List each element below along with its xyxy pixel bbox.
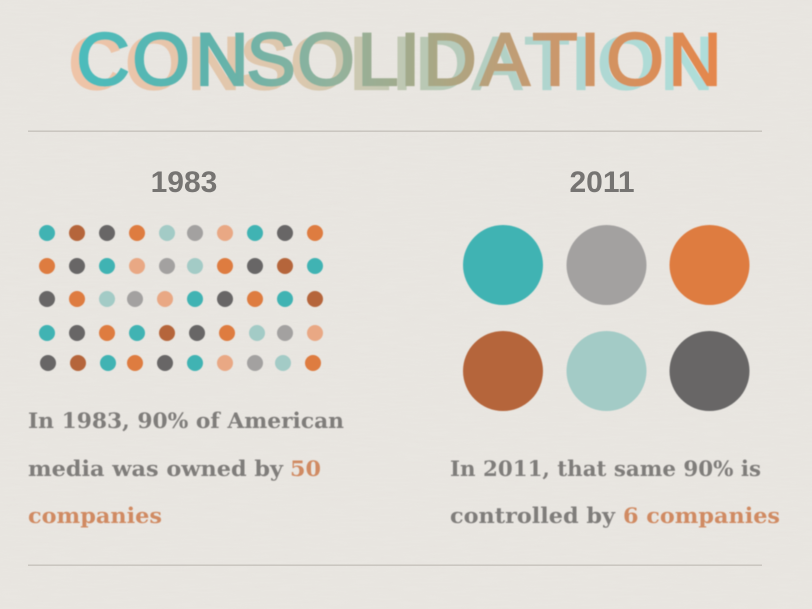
heading: 1983: 1983 xyxy=(151,166,217,199)
circles: 6 companies in 2011 xyxy=(463,225,750,411)
bottom divider xyxy=(28,564,762,566)
dot grid: 50 companies in 1983 xyxy=(39,225,323,371)
text block: 2011 caption xyxy=(450,456,780,528)
text block: 2011 caption: controlled by xyxy=(450,503,616,528)
title: CONSOLIDATION xyxy=(68,22,714,105)
text block: 1983 caption: companies xyxy=(28,503,162,528)
text block: 2011 caption: 6 companies xyxy=(623,503,780,528)
text block: 1983 caption: media was owned by xyxy=(28,456,284,481)
title: CONSOLIDATION xyxy=(76,18,722,101)
text block: 1983 caption: 50 xyxy=(290,456,321,481)
heading: 2011: 2011 xyxy=(569,166,635,199)
text block: 1983 caption: In 1983, 90% of American xyxy=(28,408,344,433)
top divider xyxy=(28,130,762,132)
text block: 2011 caption: In 2011, that same 90% is xyxy=(450,456,761,481)
text block: 1983 caption xyxy=(28,408,344,528)
